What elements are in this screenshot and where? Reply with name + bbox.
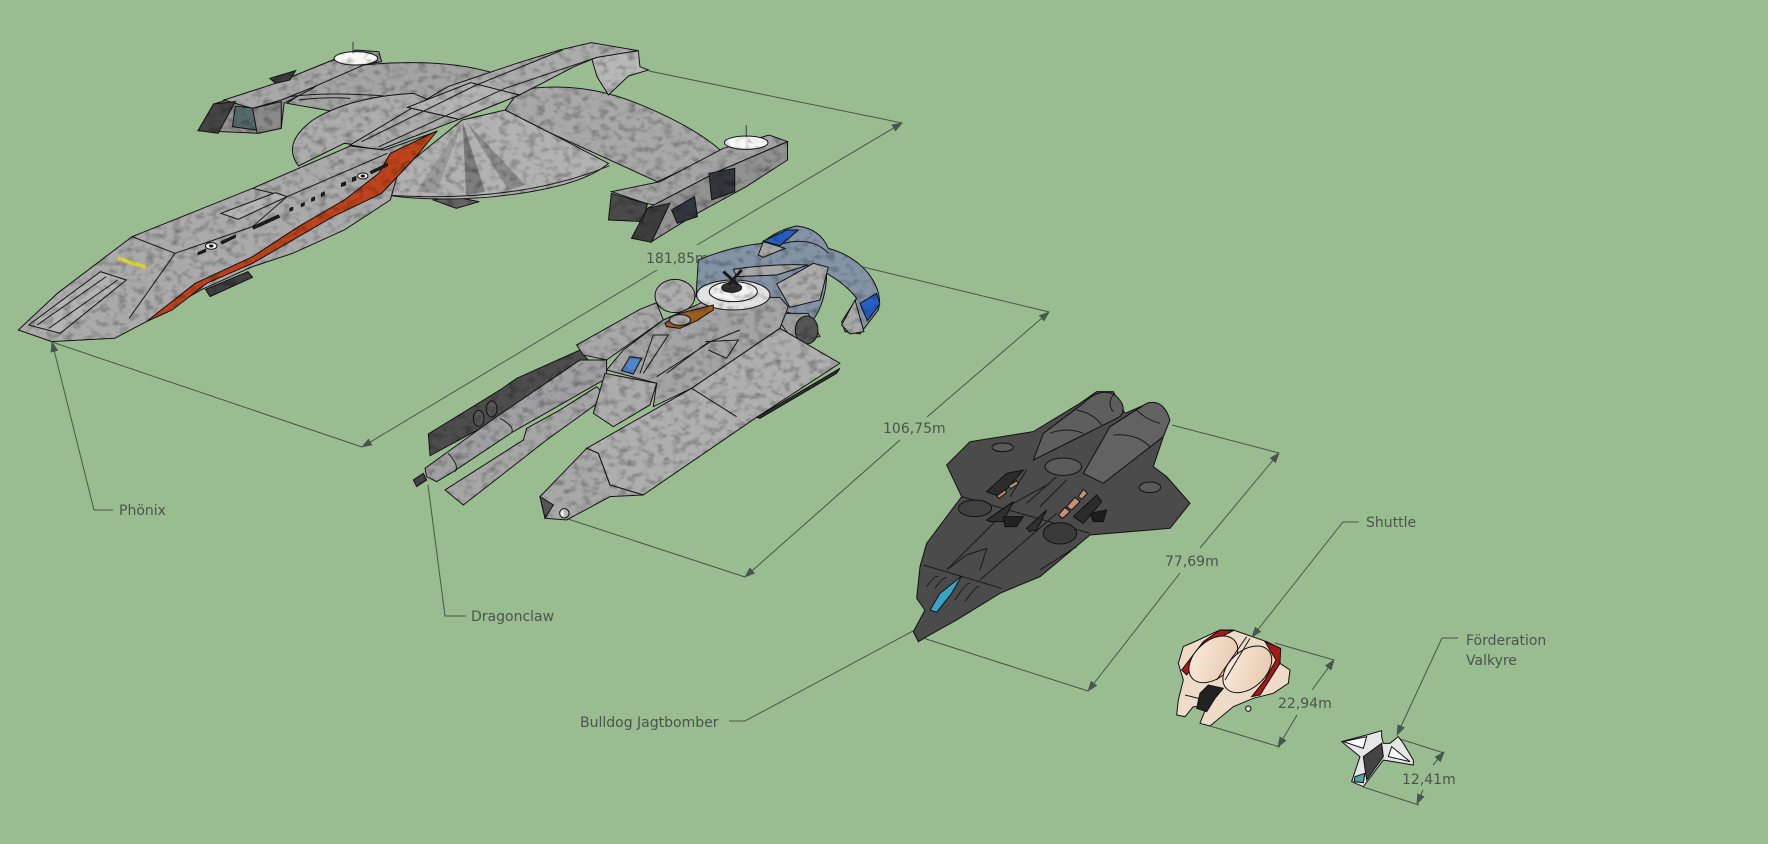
Bulldog blue canopy bbox=[930, 576, 962, 612]
Shuttle dark core bbox=[1197, 685, 1223, 712]
Phönix underside pod bbox=[433, 197, 479, 208]
Bulldog hull bbox=[913, 392, 1190, 642]
label and leader: Phönix bbox=[52, 342, 166, 519]
ship: Förderation Valkyre bbox=[1342, 731, 1413, 787]
label and leader: Phönix: Phönix bbox=[119, 503, 166, 519]
Phönix top cross strip bbox=[350, 43, 649, 150]
Phönix roundels bbox=[198, 163, 387, 255]
Bulldog hull panel lines bbox=[923, 443, 1161, 602]
Dragonclaw radar disc bbox=[697, 270, 770, 310]
dimension: Dragonclaw length 106,75m bbox=[565, 267, 1049, 577]
Phönix main hull bbox=[18, 131, 437, 342]
dimension: Valkyre length 12,41m bbox=[1363, 739, 1456, 805]
Phönix right arch wing bbox=[505, 87, 722, 182]
ship: Bulldog Jagtbomber bbox=[913, 392, 1190, 642]
Shuttle cream pods bbox=[1180, 627, 1281, 702]
Valkyre dark detail bbox=[1363, 743, 1383, 780]
dimension: Bulldog length 77,69m: 77,69m bbox=[1165, 554, 1219, 570]
label and leader: Förderation Valkyre bbox=[1397, 633, 1546, 735]
Dragonclaw upper body bbox=[607, 297, 788, 407]
Dragonclaw tail tower and engine bbox=[655, 263, 828, 344]
Dragonclaw front pylon bbox=[593, 373, 657, 427]
Dragonclaw upper rail bbox=[428, 303, 663, 456]
ship: Dragonclaw bbox=[413, 226, 880, 520]
Shuttle hull bbox=[1177, 630, 1290, 726]
label and leader: Förderation Valkyre: Valkyre bbox=[1466, 653, 1517, 669]
dimension: Shuttle length 22,94m: 22,94m bbox=[1278, 696, 1332, 712]
Phönix red stripe bbox=[146, 131, 437, 322]
label and leader: Dragonclaw bbox=[428, 485, 554, 625]
Phönix left disc bbox=[292, 93, 465, 166]
label and leader: Dragonclaw: Dragonclaw bbox=[471, 609, 554, 625]
label and leader: Shuttle bbox=[1252, 515, 1416, 637]
Bulldog salmon pads bbox=[997, 481, 1087, 518]
dimension: Dragonclaw length 106,75m: 106,75m bbox=[883, 421, 946, 437]
Dragonclaw orange plate bbox=[665, 305, 713, 328]
Phönix right disc bbox=[386, 110, 608, 199]
dimension: Phönix length 181,85m: 181,85m bbox=[646, 251, 709, 267]
Phönix rear dome bbox=[287, 63, 497, 113]
Dragonclaw main barrel bbox=[413, 360, 607, 487]
dimension: Phönix length 181,85m bbox=[52, 71, 902, 447]
label and leader: Förderation Valkyre: Förderation bbox=[1466, 633, 1546, 649]
Dragonclaw blue canopy bbox=[622, 357, 642, 374]
dimension: Valkyre length 12,41m: 12,41m bbox=[1402, 772, 1456, 788]
label and leader: Bulldog Jagtbomber: Bulldog Jagtbomber bbox=[580, 715, 719, 731]
Phönix right engine boom bbox=[608, 125, 788, 242]
label and leader: Shuttle: Shuttle bbox=[1366, 515, 1416, 531]
Phönix yellow marking bbox=[118, 258, 146, 267]
label and leader: Bulldog Jagtbomber bbox=[580, 631, 913, 731]
Dragonclaw lower rail bbox=[445, 387, 607, 505]
dimension: Shuttle length 22,94m bbox=[1210, 643, 1334, 747]
ship: Phönix bbox=[18, 42, 788, 342]
ship: Shuttle bbox=[1177, 627, 1290, 726]
Bulldog twin engines bbox=[1033, 392, 1170, 483]
Dragonclaw main wing and nose bbox=[540, 328, 840, 520]
Dragonclaw blue-grey crescent fins bbox=[696, 226, 880, 334]
Valkyre wing highlights bbox=[1343, 737, 1367, 748]
dimension: Bulldog length 77,69m bbox=[923, 425, 1279, 691]
Phönix canopy bbox=[29, 272, 126, 333]
Shuttle red trim bbox=[1182, 630, 1281, 697]
Valkyre teal canopy bbox=[1354, 773, 1365, 783]
Phönix left engine boom bbox=[198, 42, 385, 133]
